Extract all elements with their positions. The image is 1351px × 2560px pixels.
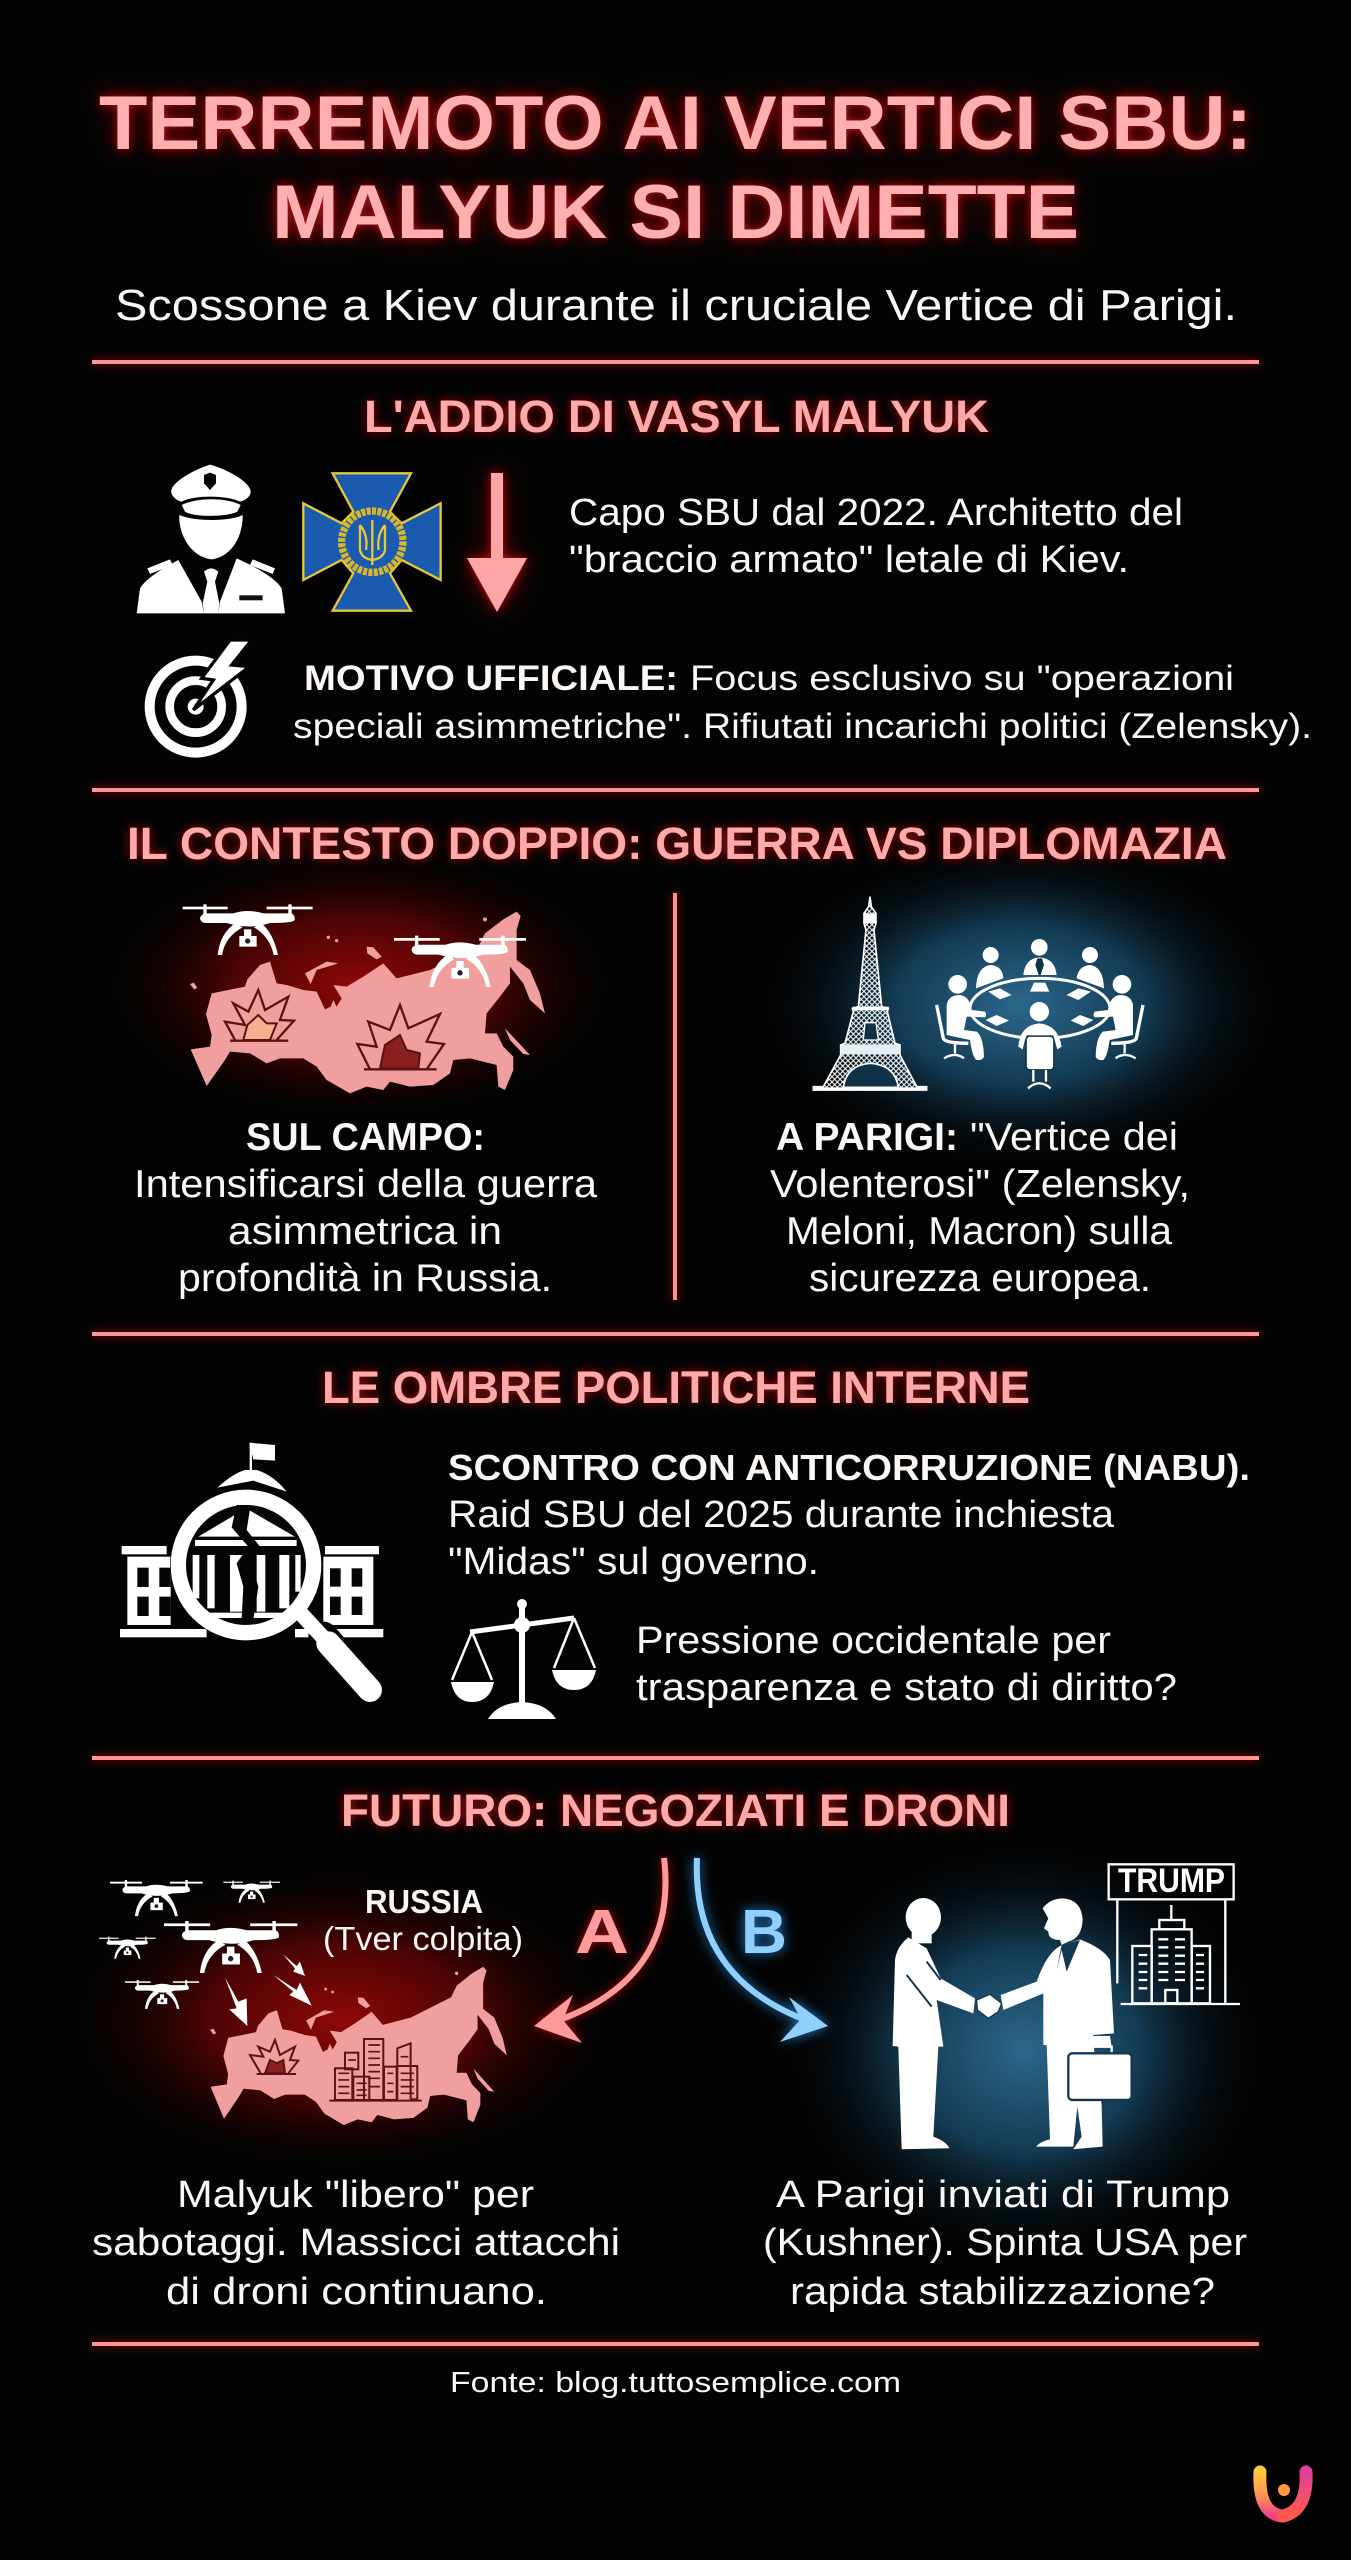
text: pressione occidentale: trasparenza e stato di diritto? (636, 1667, 1177, 1709)
arrow: down (467, 473, 527, 612)
letter B: B (741, 1898, 787, 1967)
text: russia label (323, 1883, 523, 1957)
text: capo SBU: Capo SBU dal 2022. Architetto del (569, 492, 1183, 534)
text: sul campo (134, 1116, 597, 1300)
text: capo SBU: "braccio armato" letale di Kiev. (569, 539, 1129, 581)
text: russia label: (Tver colpita) (323, 1920, 523, 1957)
title: MALYUK SI DIMETTE (272, 170, 1079, 255)
title: TERREMOTO AI VERTICI SBU: (99, 81, 1252, 166)
text: scenario B: (Kushner). Spinta USA per (763, 2222, 1247, 2264)
panel: ombre politiche (120, 1362, 1250, 1719)
glow: red (70, 1870, 610, 2170)
text: capo SBU (569, 492, 1183, 581)
text: scenario A: sabotaggi. Massicci attacchi (92, 2222, 620, 2264)
icon: russia map with buildings (210, 1967, 507, 2125)
icon: drone 2 (394, 936, 526, 987)
letter A: A (575, 1898, 629, 1967)
icon: drone swarm (99, 1880, 297, 2009)
text: a Parigi: sicurezza europea. (809, 1257, 1151, 1300)
title (99, 81, 1252, 255)
text: scontro con anticorruzione (448, 1447, 1250, 1583)
divider (92, 1332, 1259, 1336)
arrow: path B (697, 1858, 828, 2042)
text: motivo ufficiale: Focus esclusivo su "operazioni (690, 659, 1234, 698)
icon: drone 1 (183, 904, 313, 955)
heading: ombre politiche: LE OMBRE POLITICHE INTERNE (322, 1362, 1030, 1413)
text: scontro con anticorruzione: "Midas" sul governo. (448, 1541, 819, 1583)
heading: l'addio: L'ADDIO DI VASYL MALYUK (364, 391, 990, 442)
glow: blue (765, 845, 1275, 1165)
glow: blue (790, 1845, 1260, 2255)
source: Fonte: blog.tuttosemplice.com (450, 2367, 901, 2399)
text: russia label: RUSSIA (365, 1883, 483, 1920)
text: motivo ufficiale: speciali asimmetriche". Rifiutati incarichi politici (Zelensky). (293, 707, 1312, 746)
text: sul campo: asimmetrica in (228, 1210, 502, 1253)
text: motivo ufficiale: MOTIVO UFFICIALE: (304, 659, 678, 698)
text: scenario A: di droni continuano. (166, 2271, 547, 2313)
subtitle: Scossone a Kiev durante il cruciale Vertice di Parigi. (115, 281, 1237, 330)
text: scenario B: A Parigi inviati di Trump (776, 2174, 1230, 2216)
icon: russia map with explosions (190, 912, 545, 1093)
icon: scales (451, 1599, 596, 1719)
icon: logo (1260, 2472, 1306, 2516)
divider (92, 2342, 1259, 2346)
icon: handshake (893, 1898, 1132, 2149)
text: a Parigi: Volenterosi" (Zelensky, (770, 1163, 1190, 1206)
glow: red (105, 850, 615, 1120)
heading: futuro: FUTURO: NEGOZIATI E DRONI (341, 1785, 1010, 1836)
text: scenario A (92, 2174, 620, 2313)
text: motivo ufficiale (293, 659, 1312, 746)
icon: target with bolt (150, 640, 252, 753)
text: sul campo: SUL CAMPO: (246, 1116, 485, 1159)
divider (92, 788, 1259, 792)
icon: officer (137, 465, 285, 613)
icon: SBU emblem (303, 473, 441, 611)
vertical divider (673, 893, 677, 1300)
icon: strike bolts (225, 1954, 312, 2026)
icon: trump tower (1109, 1864, 1240, 2004)
heading: contesto doppio: IL CONTESTO DOPPIO: GUERRA VS DIPLOMAZIA (127, 818, 1227, 869)
text: scontro con anticorruzione: Raid SBU del 2025 durante inchiesta (448, 1494, 1115, 1536)
text: a Parigi (770, 1116, 1190, 1300)
panel: l'addio di Malyuk (137, 391, 1312, 753)
text: pressione occidentale: Pressione occidentale per (636, 1620, 1111, 1662)
text: scenario A: Malyuk "libero" per (177, 2174, 534, 2216)
text: scontro con anticorruzione: SCONTRO CON ANTICORRUZIONE (NABU). (448, 1447, 1250, 1488)
text: sul campo: Intensificarsi della guerra (134, 1163, 597, 1206)
text: scenario B (763, 2174, 1247, 2313)
panel: futuro (70, 1785, 1260, 2313)
text: pressione occidentale (636, 1620, 1177, 1709)
text: trump sign: TRUMP (1118, 1862, 1225, 1900)
panel: contesto doppio (105, 818, 1275, 1300)
icon: eiffel tower (813, 897, 927, 1090)
text: a Parigi: A PARIGI: (776, 1116, 958, 1159)
arrow: path A (534, 1858, 666, 2043)
divider (92, 360, 1259, 364)
text: a Parigi: "Vertice dei (970, 1116, 1178, 1159)
divider (92, 1756, 1259, 1760)
text: scenario B: rapida stabilizzazione? (790, 2271, 1215, 2313)
icon: meeting table (937, 939, 1143, 1088)
icon: government building under magnifier (120, 1443, 383, 1690)
text: sul campo: profondità in Russia. (178, 1257, 552, 1300)
text: a Parigi: Meloni, Macron) sulla (786, 1210, 1172, 1253)
